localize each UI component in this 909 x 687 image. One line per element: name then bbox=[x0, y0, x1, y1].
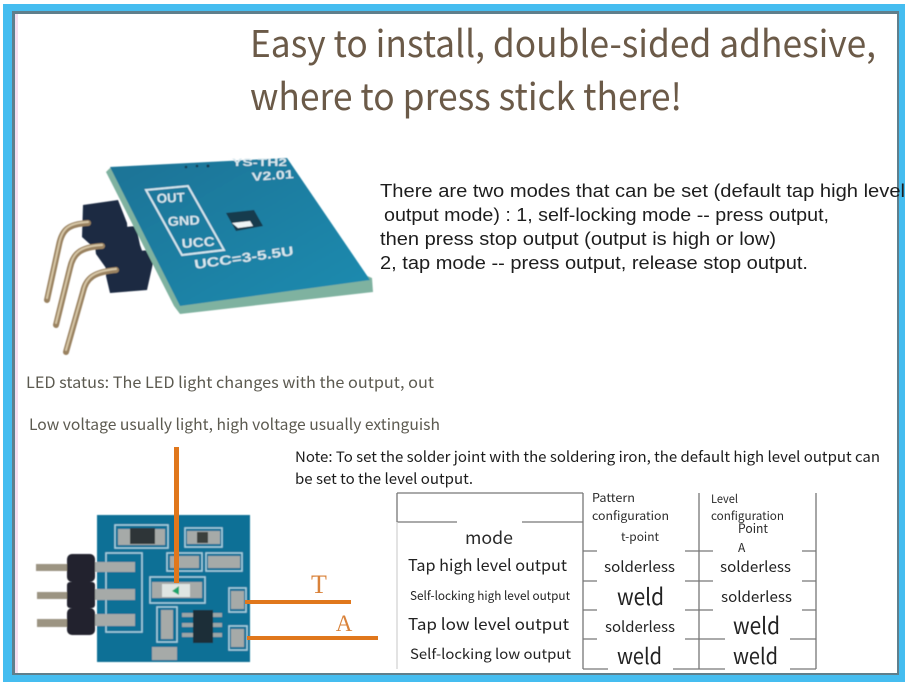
table header: A bbox=[738, 539, 746, 556]
orange LED leader line bbox=[174, 447, 179, 583]
note: be set to the level output. bbox=[295, 468, 473, 489]
silkscreen pin label box bbox=[146, 186, 224, 255]
icon: header pins bbox=[36, 564, 68, 627]
modes description: output mode) : 1, self-locking mode -- press output, bbox=[384, 205, 829, 225]
table header: configuration bbox=[592, 507, 669, 524]
table values: solderless bbox=[604, 556, 675, 577]
table values bbox=[604, 556, 792, 671]
configuration table bbox=[397, 489, 816, 671]
table row labels: Tap high level output bbox=[408, 552, 567, 576]
table values: weld bbox=[733, 639, 778, 671]
icon: black pin header bbox=[82, 200, 153, 293]
LED bbox=[162, 584, 190, 597]
traces and pads bbox=[106, 525, 247, 650]
module photo: top view of touch board bbox=[47, 157, 373, 352]
table values: solderless bbox=[721, 586, 792, 607]
blue board bbox=[97, 515, 250, 662]
table header: t-point bbox=[621, 528, 659, 545]
icon: three small dots bbox=[185, 164, 210, 168]
table row labels: Self-locking high level output bbox=[410, 587, 570, 604]
table header: Point bbox=[738, 518, 768, 537]
leader line T: T bbox=[311, 570, 327, 599]
table row labels bbox=[408, 552, 572, 664]
table values: solderless bbox=[720, 556, 791, 577]
LED status text: LED status: The LED light changes with the output, out bbox=[26, 371, 434, 393]
modes description bbox=[380, 181, 905, 273]
silkscreen labels: GND bbox=[167, 212, 200, 229]
blue board face bbox=[110, 158, 370, 306]
table header bbox=[465, 489, 784, 556]
modes description: There are two modes that can be set (default tap high level bbox=[380, 181, 905, 201]
LED status text bbox=[26, 371, 440, 435]
title: Easy to install, double-sided adhesive, bbox=[250, 14, 876, 68]
icon: black header bbox=[67, 554, 95, 635]
table header: mode bbox=[465, 524, 513, 549]
title bbox=[250, 14, 876, 121]
board edge bbox=[106, 168, 373, 314]
table header: configuration bbox=[711, 508, 784, 524]
note bbox=[295, 446, 880, 489]
table row labels: Tap low level output bbox=[408, 611, 569, 635]
module photo: bottom view with solder points bbox=[36, 515, 250, 662]
table header: Pattern bbox=[592, 489, 635, 506]
silkscreen labels: OUT bbox=[156, 190, 185, 206]
silkscreen labels: YS-TH2 bbox=[232, 157, 287, 169]
table values: weld bbox=[617, 639, 662, 671]
table values: weld bbox=[617, 578, 664, 612]
modes description: then press stop output (output is high or low) bbox=[380, 229, 776, 249]
icon: square sensor window bbox=[226, 210, 263, 231]
table header: Level bbox=[711, 491, 738, 507]
leader line A bbox=[247, 611, 378, 640]
silkscreen labels: UCC bbox=[181, 234, 216, 251]
icon: IC chip bbox=[193, 610, 213, 643]
leader line A: A bbox=[336, 611, 353, 636]
icon: bent header pins bbox=[47, 222, 116, 352]
faint left table edge bbox=[396, 522, 398, 669]
table values: weld bbox=[733, 607, 780, 641]
table values: solderless bbox=[605, 616, 675, 637]
LED status text: Low voltage usually light, high voltage usually extinguish bbox=[29, 413, 440, 435]
silkscreen labels bbox=[156, 157, 295, 272]
modes description: 2, tap mode -- press output, release stop output. bbox=[380, 253, 808, 273]
note: Note: To set the solder joint with the soldering iron, the default high level output can bbox=[295, 446, 880, 467]
silkscreen labels: UCC=3-5.5U bbox=[193, 243, 294, 272]
title: where to press stick there! bbox=[250, 67, 682, 121]
leader line T bbox=[245, 570, 351, 604]
table lines bbox=[397, 493, 816, 669]
table row labels: Self-locking low output bbox=[410, 644, 572, 664]
silkscreen labels: V2.01 bbox=[251, 167, 295, 184]
